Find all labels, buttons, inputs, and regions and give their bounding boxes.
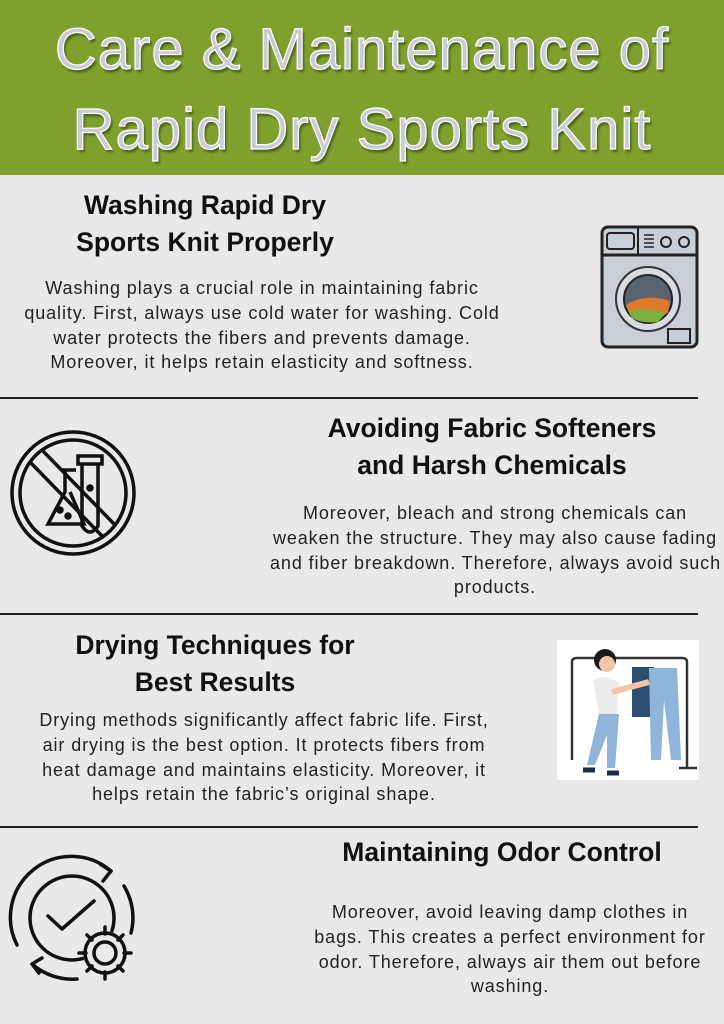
icon: washing machine (600, 226, 698, 348)
text: washing: quality. First, always use cold water for washing. Cold (24, 303, 500, 323)
text: drying: Drying methods significantly affect fabric life. First, (39, 710, 489, 730)
heading: washing: Washing Rapid Dry (84, 190, 326, 220)
heading: drying (75, 630, 355, 697)
text: avoiding softeners: and fiber breakdown. Therefore, always avoid such (270, 553, 721, 573)
text: odor control: Moreover, avoid leaving damp clothes in (332, 902, 688, 922)
title (55, 17, 672, 165)
text: washing: Moreover, it helps retain elasticity and softness. (50, 352, 474, 372)
heading: drying: Drying Techniques for (75, 630, 355, 660)
text: odor control: bags. This creates a perfect environment for (314, 927, 706, 947)
heading: washing: Sports Knit Properly (76, 227, 334, 257)
text: avoiding softeners: weaken the structure. They may also cause fading (273, 528, 717, 548)
heading: washing (76, 190, 334, 257)
illustration: woman with clothes rack (557, 640, 699, 780)
text: drying: air drying is the best option. It protects fibers from (43, 735, 485, 755)
icon: no chemicals (10, 430, 136, 556)
text: avoiding softeners: Moreover, bleach and strong chemicals can (303, 503, 687, 523)
header banner (0, 0, 724, 175)
text: washing: Washing plays a crucial role in maintaining fabric (45, 278, 479, 298)
heading: avoiding softeners: Avoiding Fabric Softeners (328, 413, 656, 443)
title: Rapid Dry Sports Knit (73, 97, 651, 162)
heading: drying: Best Results (135, 667, 295, 697)
text: washing (24, 278, 500, 372)
text: drying (39, 710, 489, 804)
text: odor control (314, 902, 706, 996)
text: avoiding softeners (270, 503, 721, 597)
text: odor control: washing. (471, 976, 549, 996)
heading: odor control: Maintaining Odor Control (342, 837, 662, 867)
text: washing: water protects the fibers and prevents damage. (53, 328, 471, 348)
title: Care & Maintenance of (55, 17, 669, 82)
text: drying: heat damage and maintains elasticity. Moreover, it (42, 760, 486, 780)
text: drying: helps retain the fabric’s original shape. (92, 784, 436, 804)
heading: avoiding softeners (328, 413, 656, 480)
text: avoiding softeners: products. (454, 577, 536, 597)
heading: avoiding softeners: and Harsh Chemicals (357, 450, 627, 480)
icon: odor control cycle (8, 854, 135, 981)
text: odor control: odor. Therefore, always air them out before (319, 952, 701, 972)
